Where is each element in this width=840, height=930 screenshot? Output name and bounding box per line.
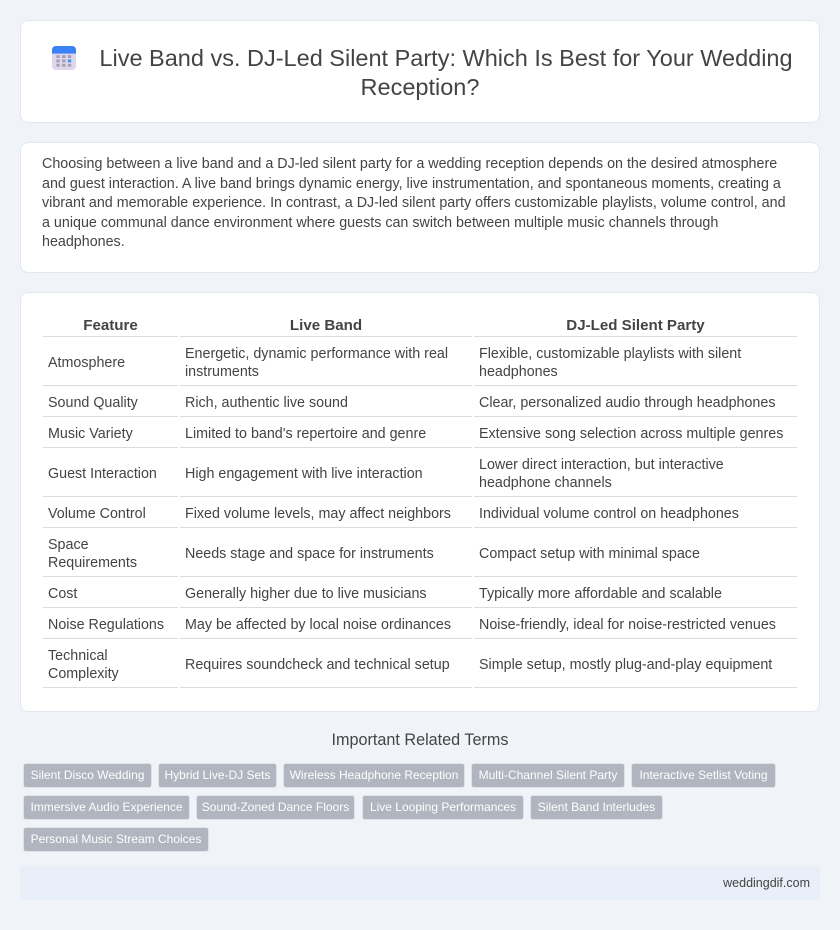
table rows: Space — [48, 537, 89, 553]
table header: DJ-Led Silent Party — [566, 317, 705, 334]
table rows: Individual volume control on headphones — [479, 506, 739, 522]
table rows: Complexity — [48, 666, 119, 682]
panel: related term tags: Live Looping Performances — [370, 800, 516, 814]
table rows: Compact setup with minimal space — [479, 546, 700, 562]
table rows: Requires soundcheck and technical setup — [185, 657, 450, 673]
panel: related term tags: Immersive Audio Experience — [30, 800, 183, 814]
table rows: Sound Quality — [48, 395, 138, 411]
panel: introduction paragraph — [20, 142, 820, 273]
table rows: Rich, authentic live sound — [185, 395, 348, 411]
footer — [20, 866, 820, 900]
title: Live Band vs. DJ-Led Silent Party: Which Is Best for Your Wedding — [99, 45, 793, 71]
table rows: Noise-friendly, ideal for noise-restricted venues — [479, 617, 776, 633]
table header — [83, 317, 705, 334]
table header: Live Band — [290, 317, 362, 334]
title: Reception? — [361, 74, 479, 100]
table rows: Fixed volume levels, may affect neighbors — [185, 506, 451, 522]
table rows: Typically more affordable and scalable — [479, 586, 722, 602]
text block: introduction: Choosing between a live band and a DJ-led silent party for a wedding reception depends on the desired atmosphere — [42, 156, 777, 172]
table rows: May be affected by local noise ordinances — [185, 617, 451, 633]
footer source text: weddingdif.com — [723, 876, 810, 890]
table header: Feature — [83, 317, 138, 334]
table rows: Flexible, customizable playlists with silent — [479, 346, 741, 362]
table rows: Technical — [48, 648, 108, 664]
table rows: Atmosphere — [48, 355, 125, 371]
panel: related term tags: Personal Music Stream Choices — [31, 832, 201, 846]
panel: comparison table — [20, 292, 820, 712]
panel: related term tags: Hybrid Live-DJ Sets — [164, 768, 271, 782]
icon: calendar — [52, 46, 76, 70]
table rows — [43, 336, 797, 688]
panel: related term tags: Sound-Zoned Dance Floors — [202, 800, 349, 814]
text block: introduction — [42, 156, 786, 250]
panel: related term tags — [23, 763, 776, 852]
table rows: Lower direct interaction, but interactive — [479, 457, 724, 473]
table rows: Cost — [48, 586, 77, 602]
text block: introduction: vibrant and memorable experience. In contrast, a DJ-led silent party offers customizable playlists, volume control, and — [42, 195, 786, 211]
panel: related term tags: Silent Disco Wedding — [31, 768, 144, 782]
text block: introduction: and guest interaction. A live band brings dynamic energy, live instrumentation, and spontaneous moments, creating a — [42, 176, 781, 192]
table rows: High engagement with live interaction — [185, 466, 423, 482]
table rows: Limited to band's repertoire and genre — [185, 426, 426, 442]
table rows: Energetic, dynamic performance with real — [185, 346, 448, 362]
table rows: Clear, personalized audio through headphones — [479, 395, 776, 411]
table rows: Guest Interaction — [48, 466, 157, 482]
panel: related term tags: Silent Band Interludes — [538, 800, 655, 814]
table rows: headphones — [479, 364, 558, 380]
text block: introduction: headphones. — [42, 234, 125, 250]
title — [99, 45, 793, 100]
panel: related term tags: Interactive Setlist Voting — [639, 768, 768, 782]
panel: related term tags: Wireless Headphone Reception — [290, 768, 458, 782]
table rows: Simple setup, mostly plug-and-play equipment — [479, 657, 772, 673]
table rows: Needs stage and space for instruments — [185, 546, 434, 562]
panel: related term tags: Multi-Channel Silent Party — [479, 768, 617, 782]
table rows: Generally higher due to live musicians — [185, 586, 427, 602]
heading: related terms: Important Related Terms — [332, 731, 508, 749]
table rows: instruments — [185, 364, 259, 380]
table rows: Extensive song selection across multiple genres — [479, 426, 783, 442]
table rows: Noise Regulations — [48, 617, 164, 633]
panel: header — [20, 20, 820, 123]
table rows: Volume Control — [48, 506, 146, 522]
table rows: Music Variety — [48, 426, 133, 442]
table rows: Requirements — [48, 555, 137, 571]
table rows: headphone channels — [479, 475, 612, 491]
text block: introduction: a unique communal dance environment where guests can switch between multiple music channels through — [42, 214, 718, 230]
